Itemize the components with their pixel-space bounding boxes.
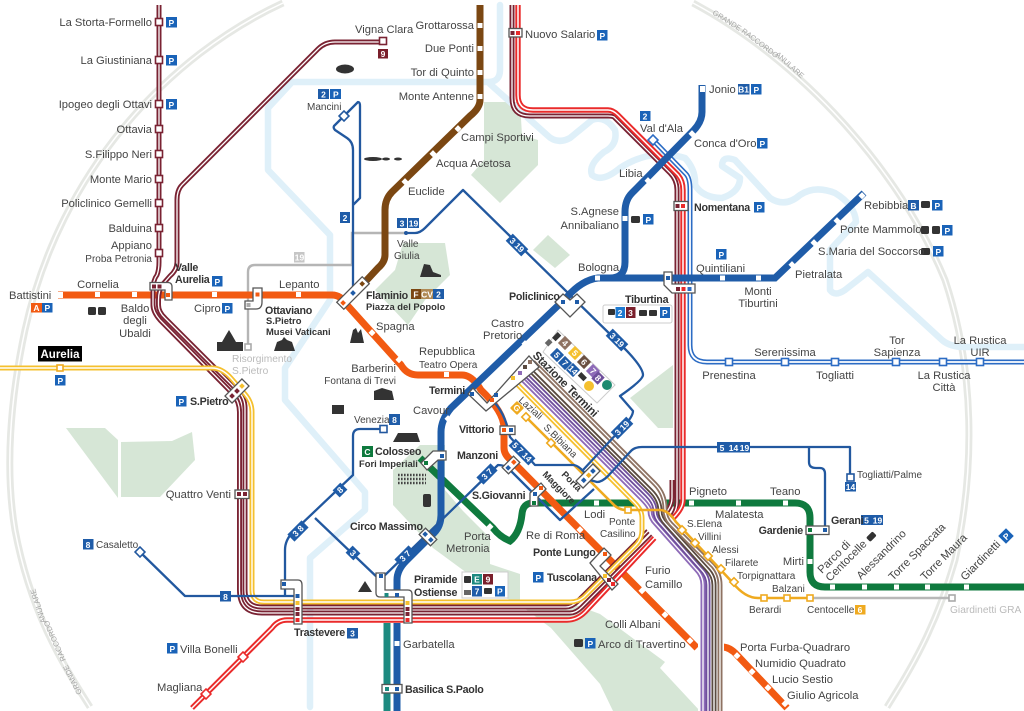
yellow rail line to Aurelia [0,368,642,602]
station labels: left aligned: Ponte Lungo [533,547,596,559]
station labels: left aligned: Camillo [645,579,682,591]
station labels: centred: Sapienza [874,347,921,359]
station labels: left aligned: Venezia [354,415,390,426]
station labels: left aligned: Lodi [584,509,605,521]
station labels: left aligned: Valle [397,239,419,250]
station labels: left aligned: Numidio Quadrato [755,658,846,670]
grey open stations [245,344,955,601]
station labels: right aligned: Monte Mario [90,174,152,186]
rotated station labels: Porta [560,469,585,494]
station labels: centred: Cornelia [77,279,120,291]
FL2 light blue rail line [653,140,1024,362]
open stations on FL2 [648,135,984,366]
station labels: left aligned: Casaletto [96,540,139,551]
station labels: left aligned: Magliana [157,682,203,694]
station labels: left aligned: Vigna Clara [355,24,414,36]
line badges: B [910,201,917,211]
station labels: centred [77,279,1007,394]
station labels: left aligned: Cavour [413,405,449,417]
parking letters [44,18,950,654]
station labels: centred: Ubaldi [119,328,151,340]
station labels: left aligned: Villa Bonelli [180,644,238,656]
line badges: 6 [858,605,863,615]
Stazione Termini services card: 5 [570,348,580,358]
Stazione Termini services card: 7 [588,366,598,376]
station labels: left aligned: Teano [770,486,800,498]
rotated line badges: 3 [348,548,358,558]
station labels: left aligned: S.Giovanni [472,490,526,502]
station labels: right aligned: Due Ponti [425,43,474,55]
station labels: right aligned: Policlinico Gemelli [61,198,152,210]
line badges: 2 [436,290,441,300]
parking letters: P [588,639,594,649]
ring road label: ANULARE [28,588,48,624]
station labels: left aligned: Colli Albani [605,619,660,631]
Piramide services box: 9 [486,574,491,584]
station labels: centred: La Rustica [954,335,1007,347]
parking letters: P [756,203,762,213]
landmark: Castel Sant'Angelo [274,337,295,351]
metro C green line [420,458,1024,587]
station labels: left aligned: Policlinico [509,291,560,303]
line badges: 19 [295,252,304,262]
station: Manzoni [502,456,520,474]
station labels: right aligned: Mirti [783,556,804,568]
parking letters: P [224,304,230,314]
station labels: left aligned: Piramide [414,574,457,586]
station labels: right aligned: Gardenie [759,525,803,537]
landmark: St Peter [217,330,243,351]
station labels: left aligned: Pretorio [483,330,522,342]
Stazione Termini services card: 5 [552,350,562,360]
bundle of lines from Termini: casing [522,372,711,711]
station labels: left aligned: Pietralata [795,269,843,281]
station labels: left aligned: Ponte Mammolo [840,224,921,236]
tram lines blue [140,102,850,596]
line badges: 3 [350,628,355,638]
landmark: Auditorium [364,157,382,161]
station labels: centred: Baldo [121,303,149,315]
station labels: right aligned: Balduina [108,223,153,235]
rotated line badges: 3 7 [397,548,413,564]
station labels: left aligned: Cipro [194,303,221,315]
Tiburtina services box: 2 [618,308,623,318]
station labels: left aligned: Ostiense [414,587,457,599]
parking letters: P [168,18,174,28]
Aurelia black label [38,346,82,362]
parking letters: P [760,139,766,149]
brown Flaminio line [352,5,480,296]
station: Porta Maggiore [576,464,600,488]
line badges: 2 [321,90,326,100]
station labels: right aligned: Tor di Quinto [411,67,474,79]
rotated line badges [287,234,633,567]
parking diamond Giardinetti [998,528,1014,544]
station: Termini complex [468,356,539,411]
Piramide services box: E [474,574,480,584]
line badges: 8 [392,415,397,425]
station labels: left aligned: Casilino [600,529,636,540]
Piramide services box [462,572,508,598]
small Valle Giulia stop [404,231,408,235]
rotated station labels: Torre Maura [919,531,970,583]
line badges: B1 [738,84,749,94]
ring road label: GRANDE [61,663,84,696]
station: Ponte Lungo Tuscolana [590,548,618,590]
station labels: right aligned: Fontana di Trevi [324,376,396,387]
ring road label: ANULARE [774,50,806,80]
tram G badge: G [511,402,523,414]
station: Piramide Ostiense [376,573,412,623]
station: Tiburtina [664,272,695,293]
metro B line south section [394,623,400,711]
landmarks [217,64,441,592]
station labels: left aligned: Furio [645,565,670,577]
station labels: right aligned: Grottarossa [416,20,475,32]
rotated line badges: 8 [335,485,345,495]
station: Circo Massimo [419,528,437,546]
station labels: left aligned: Nomentana [694,202,751,214]
station labels: left aligned: Pigneto [689,486,727,498]
grey tram 19 [248,233,405,347]
station labels: left aligned: Alessi [712,545,739,556]
Tiburtina services box: 3 [628,308,633,318]
station labels: right aligned: Annibaliano [561,220,619,232]
station labels: centred: Togliatti [816,370,854,382]
ring road label [28,8,806,696]
station labels: left aligned: Euclide [408,186,445,198]
tram G line [526,417,810,598]
landmark: Olimpico stadium [336,64,354,74]
rotated line badges: 3 19 [608,331,627,350]
station: Colosseo [421,451,446,470]
station labels: left aligned: S.Pietro [190,396,229,408]
parking letters: P [58,376,64,386]
parking letters: P [944,226,950,236]
Stazione Termini services card [543,330,615,403]
metro B line [397,193,864,597]
station labels: left aligned: Giardinetti GRA [950,605,1022,616]
open stations on Lazio rail red [201,652,248,699]
line badges: 3 [400,218,405,228]
parking letters: P [936,247,942,257]
station: S.Giovanni [530,483,546,506]
Aurelia black label: Aurelia [40,349,80,361]
station labels: left aligned: Conca d'Oro [694,138,756,150]
station labels: left aligned: Arco di Travertino [598,639,686,651]
parks [66,102,700,711]
station labels: left aligned: Rebibbia [864,200,909,212]
rotated station labels: S.Bibiana [541,422,579,461]
station: Gardenie [806,526,829,534]
Stazione Termini services card: 4 [560,338,570,348]
rotated station labels: Centocelle [824,538,870,584]
rotated line badges: 3 19 [508,236,527,255]
Stazione Termini services card: 6 [579,357,589,367]
station labels: left aligned: Villini [698,532,721,543]
station labels: left aligned: Valle [175,262,198,274]
station labels: left aligned: Fori Imperiali [359,458,418,469]
station labels: right aligned: Monte Antenne [399,91,474,103]
station labels: left aligned: Jonio [709,84,736,96]
rotated station labels: Alessandrino [855,528,909,582]
station labels: centred: Prenestina [702,370,757,382]
landmark: Pyramid [358,581,372,592]
station labels: left aligned: S.Maria del Soccorso [818,246,924,258]
station labels: right aligned: Appiano [111,240,152,252]
line badges: 14 [846,482,855,492]
station labels: left aligned: S.Pietro [266,315,302,326]
landmark: Trevi [374,388,394,400]
station labels: right aligned: Termini [429,385,465,397]
station labels: right aligned: Ottavia [117,124,153,136]
line badges: 9 [381,49,386,59]
station labels: left aligned: S.Pietro [232,366,269,377]
station labels: left aligned: Campi Sportivi [461,132,534,144]
station labels: right aligned: Barberini [351,363,396,375]
Stazione Termini services card: 7 [560,358,570,368]
parking diamond Giardinetti: P [1001,531,1012,542]
parking letters: P [168,56,174,66]
landmark: Arch of Constantine [423,494,431,507]
station labels: left aligned: Porta [464,531,492,543]
station labels: centred: Città [932,382,956,394]
station: Nomentana [674,202,688,210]
landmark: Auditorium third hall [394,158,402,160]
parking letters: P [646,215,652,225]
station labels: left aligned: S.Elena [687,519,722,530]
station labels: right aligned: La Storta-Formello [59,17,152,29]
parking letters: P [934,201,940,211]
tram G badge [510,401,524,415]
station labels: left aligned: Malatesta [715,509,764,521]
landmark: Vittoriano [393,433,420,442]
station labels: left aligned: Acqua Acetosa [436,158,511,170]
station labels: left aligned: Colosseo [375,446,422,458]
station: Trastevere [281,580,302,624]
parking letters: P [536,573,542,583]
landmark: Colosseum [398,475,426,483]
line badges: F [413,290,419,300]
rotated station labels: Parco di [816,539,853,576]
station labels: centred: Tiburtini [738,298,778,310]
Stazione Termini services card: 8 [593,373,603,383]
parking badges [42,17,952,654]
Giardinetti grey extension [810,597,952,599]
parking letters: P [170,644,176,654]
parking letters: P [600,31,606,41]
rivers [268,5,1024,707]
station labels: left aligned: Ottaviano [265,305,313,317]
landmark: Piazza del Popolo tower [350,328,364,343]
station labels: left aligned: Libia [619,168,643,180]
rotated line badges: 5 7 14 [510,440,534,464]
station labels: left aligned: Giulio Agricola [787,690,859,702]
station labels: centred: La Rustica [918,370,971,382]
rotated station labels: Stazione Termini [530,350,600,420]
rotated station labels [516,350,1003,584]
station labels: left aligned: Basilica S.Paolo [405,684,484,696]
station labels: left aligned: Giulia [394,251,420,262]
station labels: left aligned: Musei Vaticani [266,326,331,337]
station: Vittorio [500,426,515,434]
station: Ottaviano [245,288,262,309]
Piramide services box: 7 [475,586,480,596]
station labels: right aligned: La Giustiniana [80,55,153,67]
Stazione Termini services card: 14 [566,363,580,377]
line badges: 8 [223,592,228,602]
landmark: Villa Giulia [420,264,441,277]
ring road label: GRANDE [711,8,743,33]
open stations on maroon line [156,18,386,256]
parking letters: P [178,397,184,407]
rotated station labels: Torre Spaccata [887,521,949,583]
station labels: left aligned: Tiburtina [625,294,670,306]
station: Nuovo Salario [509,28,522,37]
metro A orange line west [58,295,697,648]
station labels: left aligned: Piazza del Popolo [366,301,445,312]
rotated line badges: 3 8 [290,523,306,539]
station labels: right aligned: Proba Petronia [85,254,152,265]
station labels: left aligned: Porta Furba-Quadraro [740,642,850,654]
station labels: right aligned [59,17,804,568]
station labels: left aligned: Re di Roma [526,530,586,542]
station labels: left aligned: Mancini [307,102,341,113]
station labels: left aligned: Tuscolana [547,572,598,584]
ring road label: RACCORDO [740,26,780,60]
station labels: left aligned: Battistini [9,290,51,302]
station labels: left aligned: Quintiliani [696,263,745,275]
line badges: 19 [873,516,882,526]
station labels: left aligned: Spagna [376,321,415,333]
metro E teal line [384,623,390,711]
line badges [31,49,919,638]
station labels: left aligned: Balzani [772,584,805,595]
station labels: left aligned: Teatro Opera [419,360,478,371]
station labels: left aligned: Castro [491,318,524,330]
station labels: left aligned: Lucio Sestio [772,674,833,686]
station labels: left aligned: Aurelia [175,274,211,286]
bundle: purple and tan lines [519,362,720,711]
open stations tram G [57,365,813,601]
station labels: left aligned: Val d'Ala [640,123,684,135]
station labels: left aligned: Metronia [446,543,490,555]
station labels: left aligned: Lepanto [279,279,319,291]
station labels: left aligned: Vittorio [459,424,495,436]
line badges: 2 [343,213,348,223]
line badges: 5 [720,443,725,453]
station labels: centred: UIR [970,347,990,359]
line badges: 19 [740,443,749,453]
line badges: C [364,447,371,457]
station labels: left aligned: Filarete [725,558,759,569]
station labels: left aligned: Berardi [749,605,781,616]
station labels: right aligned: S.Filippo Neri [85,149,152,161]
rotated line badges: 3 19 [613,418,632,437]
station labels: left aligned: Torpignattara [737,571,796,582]
parking letters: P [333,90,339,100]
station labels: left aligned: Manzoni [457,450,498,462]
station: S.Pietro [225,379,249,403]
station labels: left aligned: Circo Massimo [350,521,423,533]
line badges: 8 [86,540,91,550]
Piramide services box: P [497,586,503,596]
station: Basilica S.Paolo [382,684,402,693]
station labels: left aligned: Repubblica [419,346,476,358]
station labels: centred: Tor [889,335,905,347]
landmark: Auditorium second hall [382,158,390,160]
metro A orange line east [722,647,787,708]
bus icons [88,201,940,647]
rotated line badges: 3 7 [479,466,495,482]
station labels: right aligned: Quattro Venti [166,489,231,501]
rail lines red and maroon [153,5,683,708]
station labels: centred: Serenissima [754,347,817,359]
parking letters: P [44,303,50,313]
line badges: 5 [864,516,869,526]
station labels: centred: Monti [744,286,772,298]
station: Policlinico [555,294,585,317]
line badges: 2 [643,112,648,122]
metro B1 line [600,85,702,278]
parking letters: P [214,277,220,287]
rotated station labels: Giardinetti [959,539,1003,583]
Tiburtina services box: P [662,308,668,318]
ring road label: RACCORDO [42,619,68,663]
station labels: right aligned: S.Agnese [570,206,619,218]
landmark: Palazzo [332,405,344,414]
station: Quattro Venti [235,490,249,498]
station labels: left aligned: Garbatella [403,639,455,651]
station: Valle Aurelia [150,282,172,300]
station labels: left aligned: Trastevere [294,627,345,639]
open stations on trams [135,111,854,557]
station: Flaminio [337,277,369,309]
station labels: left aligned: Centocelle [807,605,855,616]
line badges: 19 [409,218,418,228]
station labels: left aligned: Ponte [609,517,636,528]
line badges: A [33,303,40,313]
station labels: left aligned: Risorgimento [232,354,292,365]
parking letters: P [168,100,174,110]
parking letters: P [754,85,760,95]
line badges: CV [421,290,433,300]
station labels: left aligned: Togliatti/Palme [857,470,922,481]
rotated station labels: Laziali [516,395,544,422]
station labels: left aligned: Gerani [831,515,864,527]
station labels: centred: degli [123,315,147,327]
station labels: left aligned: Bologna [578,262,620,274]
line badges: 14 [729,443,738,453]
station labels: left aligned: Flaminio [366,290,409,302]
parking letters: P [718,250,724,260]
rotated station labels: Maggiore [541,469,578,506]
Tiburtina services box [603,305,672,323]
station labels: right aligned: Ipogeo degli Ottavi [59,99,152,111]
station labels: left aligned: Nuovo Salario [525,29,595,41]
